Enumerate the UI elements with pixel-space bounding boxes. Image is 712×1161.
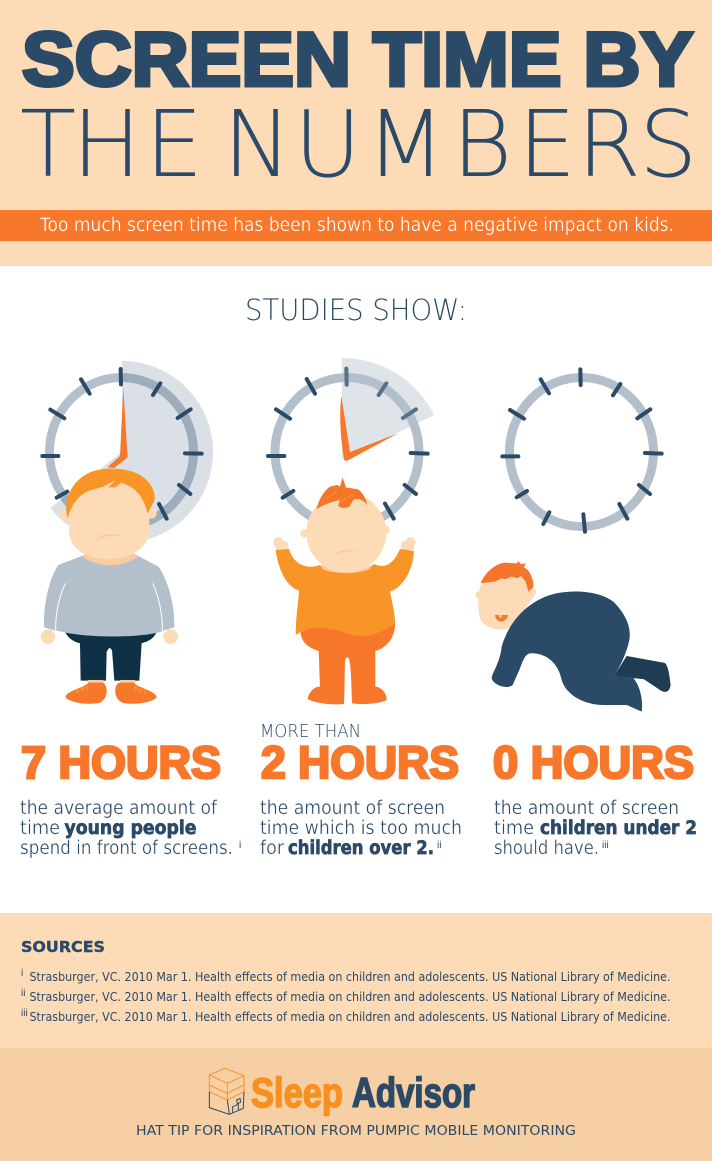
source list: ii [21, 988, 25, 999]
title: screen time by: SCREEN TIME BY [22, 18, 693, 102]
panel: footer [0, 1048, 712, 1161]
logo wordmark: Sleep [251, 1069, 343, 1116]
stat: more than 2 hours: time which is too much [260, 818, 462, 839]
stat: more than 2 hours [260, 721, 462, 859]
source list: iii [21, 1008, 28, 1019]
stat: 7 hours: time [20, 818, 60, 839]
title: the numbers: THE NUMBERS [20, 91, 697, 198]
clock: 7 hours [42, 361, 213, 543]
stat: more than 2 hours: ii [437, 840, 441, 851]
stat: 0 hours: 0 HOURS [493, 737, 694, 788]
stat: 0 hours: time [494, 818, 534, 839]
stat: 7 hours: young people [64, 818, 196, 839]
logo wordmark [251, 1069, 475, 1116]
panel: sources [0, 913, 712, 1048]
stat: 0 hours: should have. [494, 838, 599, 859]
stat: more than 2 hours: children over 2. [288, 838, 434, 859]
stat: 0 hours: children under 2 [540, 818, 697, 839]
heading: studies show: STUDIES SHOW: [245, 293, 467, 327]
source list [21, 968, 670, 1024]
stat: more than 2 hours: MORE THAN [260, 721, 361, 742]
stat: 7 hours: i [239, 840, 241, 851]
logo wordmark: Advisor [352, 1069, 475, 1116]
stat: more than 2 hours: for [260, 838, 284, 859]
sources heading: SOURCES [21, 938, 105, 956]
subtitle band: Too much screen time has been shown to have a negative impact on kids. [39, 215, 674, 236]
stat: 0 hours: iii [602, 840, 609, 851]
icon: sleep advisor mattress logo [209, 1068, 244, 1114]
source list: i [21, 968, 23, 979]
clock: 0 hours [502, 369, 662, 532]
stat: 0 hours: the amount of screen [494, 798, 679, 819]
clock: 2 hours [268, 358, 434, 526]
stat: 7 hours: the average amount of [20, 798, 217, 819]
figure: older boy [41, 469, 178, 704]
footer credit: HAT TIP FOR INSPIRATION FROM PUMPIC MOBILE MONITORING [136, 1123, 576, 1139]
stat: more than 2 hours: the amount of screen [260, 798, 445, 819]
header panel [0, 0, 712, 266]
stat: 7 hours: 7 HOURS [21, 737, 221, 788]
stat: 7 hours [20, 737, 241, 859]
stat: 7 hours: spend in front of screens. [20, 838, 233, 859]
figure: toddler with raised arms [273, 477, 416, 704]
stat: more than 2 hours: 2 HOURS [261, 737, 459, 788]
figure: crawling baby [475, 561, 671, 712]
subtitle band [0, 210, 712, 241]
stat: 0 hours [493, 737, 697, 859]
